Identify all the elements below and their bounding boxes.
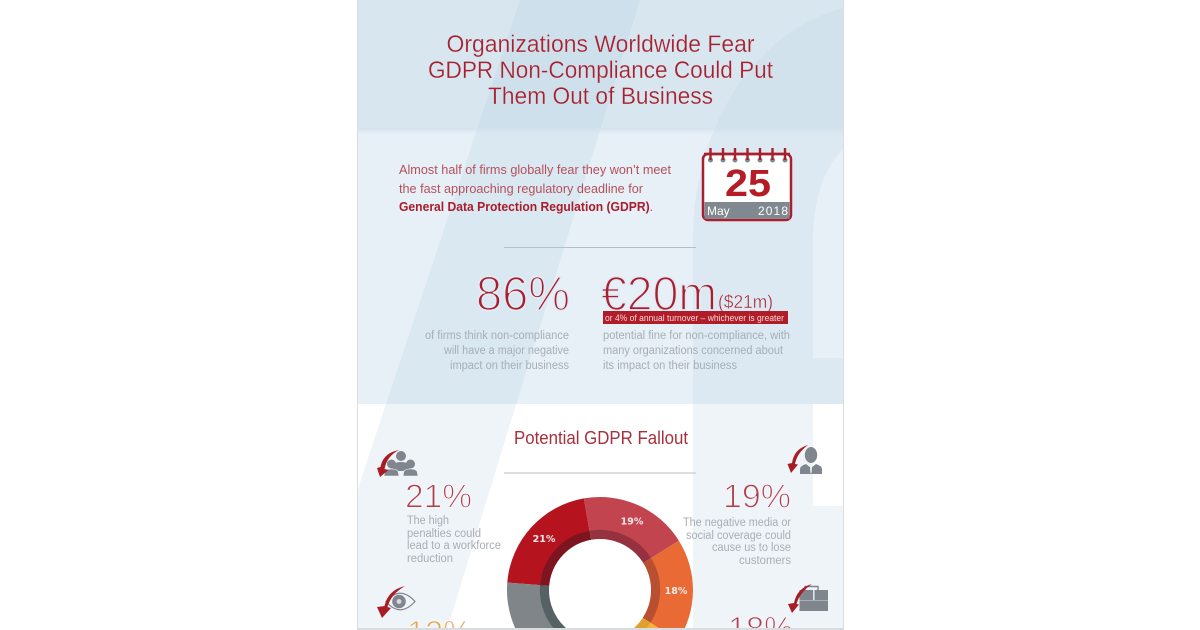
stat: 86%: 86% <box>476 268 570 321</box>
donut chart: 21% <box>533 534 556 545</box>
panel: page background <box>311 0 844 630</box>
title: GDPR Non-Compliance Could Put <box>428 57 773 84</box>
callout: 19% negative coverage: cause us to lose <box>712 542 791 554</box>
heading: Potential GDPR Fallout: Potential GDPR Fallout <box>514 428 688 448</box>
intro text: Almost half of firms globally fear they won’t meet <box>399 162 671 177</box>
segment: 19% <box>584 497 679 558</box>
stat: 86%: impact on their business <box>450 360 569 372</box>
icon: calendar 25 May 2018: May <box>707 204 730 218</box>
divider <box>504 472 696 474</box>
intro text <box>399 162 671 214</box>
stat: €20m fine: ($21m) <box>718 292 773 312</box>
callout: 21% workforce reduction: The high <box>407 515 449 527</box>
icon: people with arrow <box>377 450 418 477</box>
callout: 19% negative coverage: The negative media or <box>683 517 791 529</box>
icon: calendar 25 May 2018 <box>703 148 791 220</box>
intro text: the fast approaching regulatory deadline for <box>399 181 644 196</box>
stat: €20m fine: €20m <box>601 268 717 321</box>
stat: 86%: will have a major negative <box>443 345 569 357</box>
icon: calendar 25 May 2018: 25 <box>725 163 771 205</box>
title: Organizations Worldwide Fear <box>446 31 754 58</box>
icon: businessperson with arrow <box>788 445 822 474</box>
callout: 12% (cropped) <box>377 586 466 628</box>
icon: calendar 25 May 2018: 2018 <box>758 204 788 218</box>
intro text: General Data Protection Regulation (GDPR). <box>399 199 653 214</box>
callout: 19% negative coverage <box>683 445 822 567</box>
segment: yellow <box>646 622 658 628</box>
segment: grey <box>507 582 554 628</box>
icon: eye with arrow <box>377 586 415 618</box>
callout: 21% workforce reduction <box>377 450 501 565</box>
callout: 21% workforce reduction: lead to a workforce <box>407 540 501 552</box>
callout: 19% negative coverage: customers <box>739 555 791 567</box>
callout: 18% (cropped) <box>728 584 828 630</box>
stat: 86%: of firms think non-compliance <box>425 330 569 342</box>
stat: €20m fine: potential fine for non-compliance, with <box>603 330 790 342</box>
segment: 21% <box>507 498 590 585</box>
callout: 19% negative coverage: 19% <box>723 478 791 514</box>
donut chart <box>507 497 693 630</box>
stat: €20m fine: many organizations concerned about <box>603 345 784 357</box>
segment: 18% <box>650 541 693 630</box>
title: Them Out of Business <box>488 83 713 110</box>
divider <box>504 246 696 248</box>
title <box>428 31 773 110</box>
callout: 21% workforce reduction: penalties could <box>407 528 481 540</box>
donut chart: 18% <box>665 586 688 597</box>
stat: €20m fine <box>601 268 790 372</box>
callout: 21% workforce reduction: reduction <box>407 553 453 565</box>
donut chart: 19% <box>621 516 644 528</box>
callout: 21% workforce reduction: 21% <box>405 478 472 514</box>
inner ring <box>545 534 655 630</box>
stat: 86% <box>425 268 570 372</box>
callout: 19% negative coverage: social coverage could <box>686 530 791 542</box>
stat: €20m fine: its impact on their business <box>603 360 737 372</box>
stat: €20m fine: or 4% of annual turnover – whichever is greater <box>605 313 784 323</box>
icon: briefcase with arrow <box>788 584 828 613</box>
